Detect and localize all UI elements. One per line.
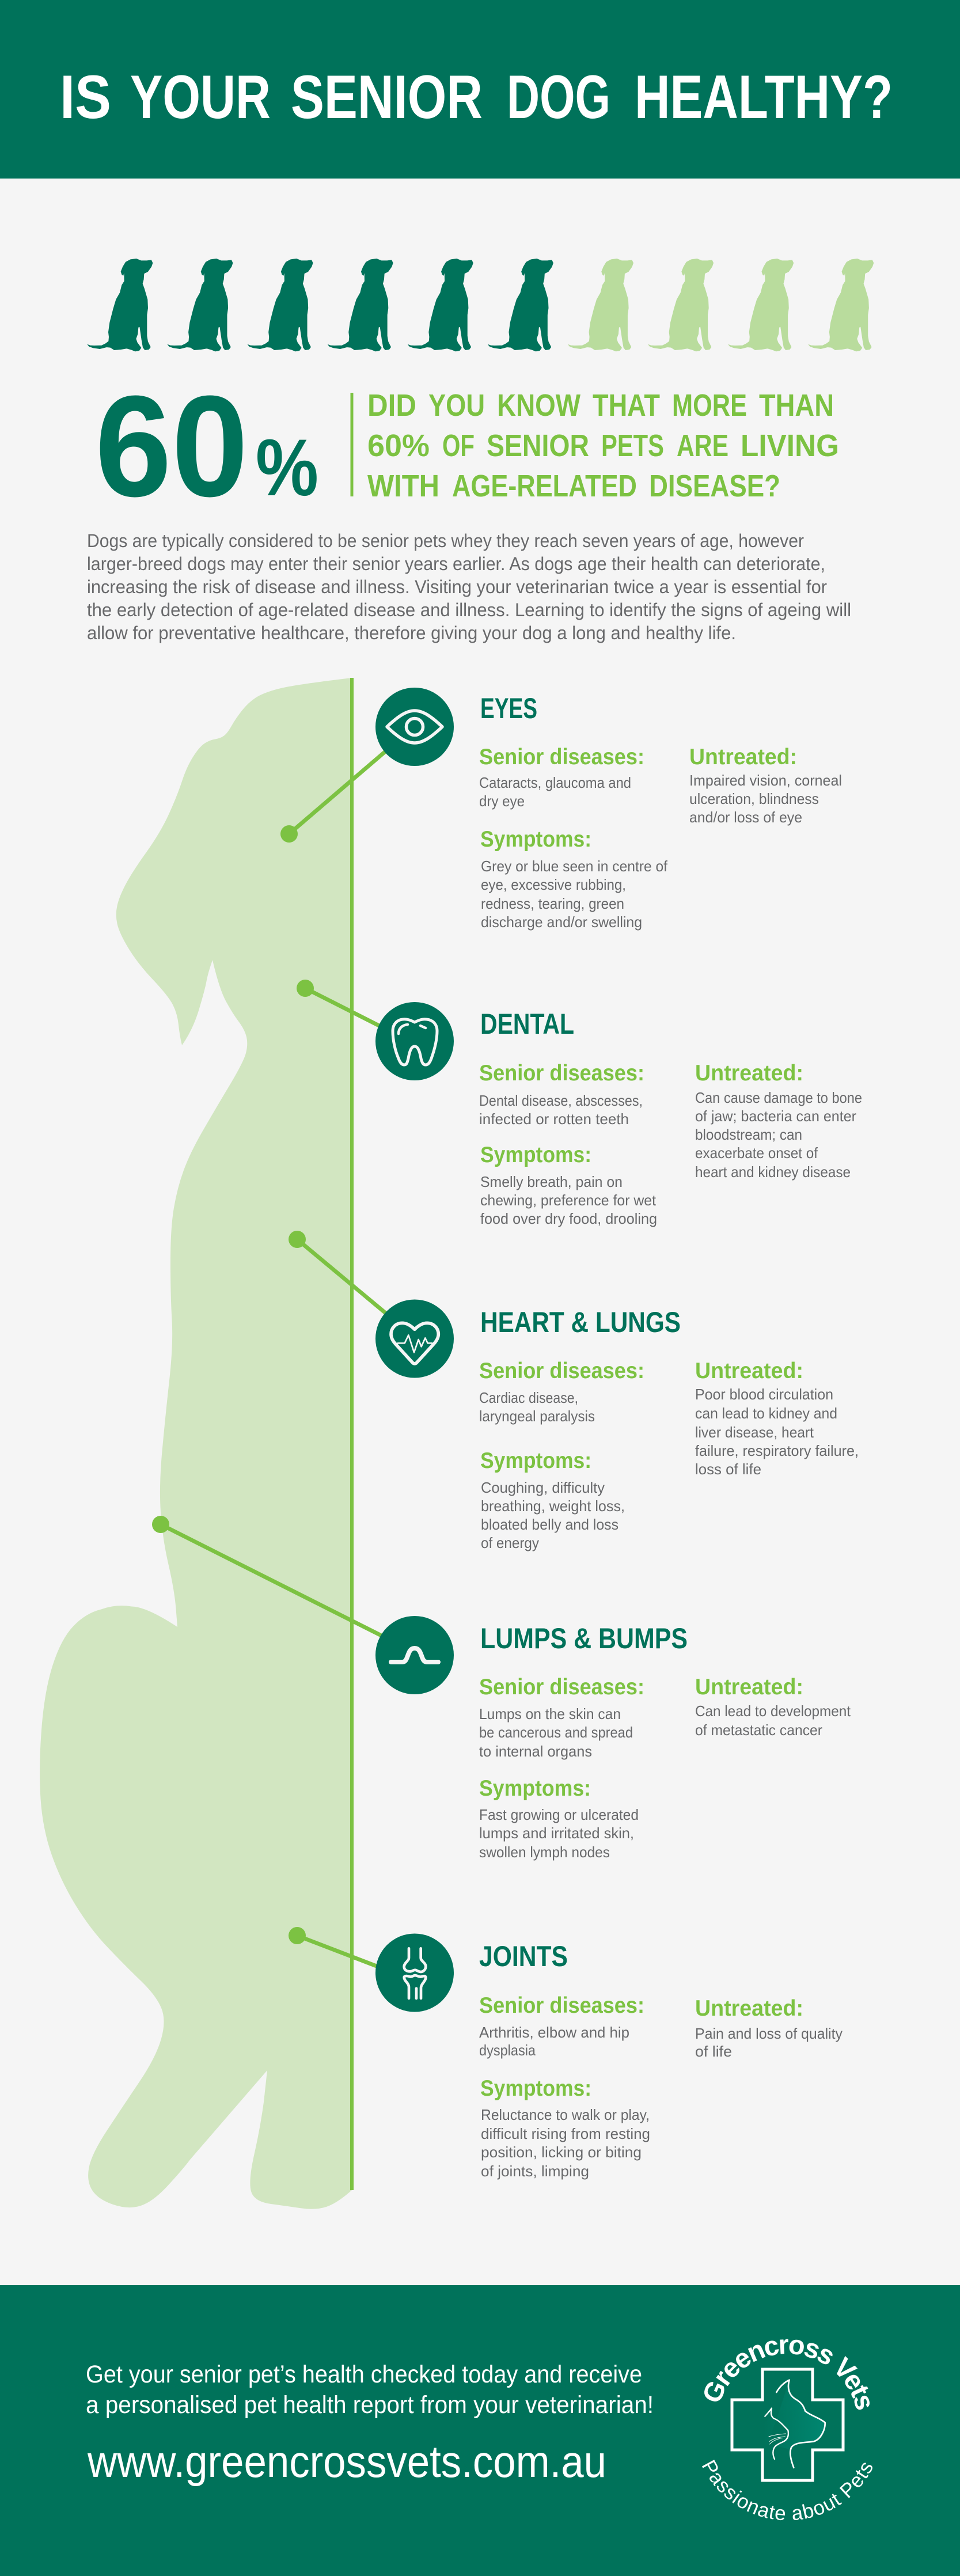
callout question: THAT — [593, 388, 660, 423]
text: symptoms — [481, 1479, 625, 1551]
footer call to action: a personalised pet health report from your veterinarian! — [86, 2391, 654, 2419]
connector: lumps — [152, 1516, 397, 1644]
title — [60, 62, 893, 131]
text: symptoms: Grey or blue seen in centre of — [481, 858, 668, 875]
subheading: untreated: Untreated: — [695, 1675, 803, 1699]
callout question: WITH — [367, 469, 439, 503]
text: untreated: bloodstream; can — [695, 1126, 802, 1143]
text: untreated: loss of life — [695, 1460, 761, 1478]
text: symptoms — [480, 1173, 657, 1227]
text: senior diseases: infected or rotten teeth — [479, 1110, 629, 1128]
subheading: senior diseases: Senior diseases: — [479, 745, 644, 769]
callout question: 60% — [367, 428, 430, 463]
big statistic: 60%: % — [256, 422, 318, 513]
title: DOG — [507, 62, 610, 131]
connector: heart — [289, 1231, 397, 1323]
subheading: untreated: Untreated: — [695, 1061, 803, 1086]
text: untreated: failure, respiratory failure, — [695, 1442, 859, 1459]
subheading: untreated: Untreated: — [689, 745, 797, 769]
text: senior diseases: Lumps on the skin can — [479, 1705, 621, 1723]
text: symptoms: Fast growing or ulcerated — [479, 1806, 639, 1823]
text: senior diseases: dysplasia — [479, 2042, 536, 2059]
intro paragraph: allow for preventative healthcare, therefore giving your dog a long and healthy life. — [87, 623, 736, 643]
subheading: untreated: Untreated: — [695, 1996, 803, 2021]
intro paragraph — [87, 530, 851, 643]
text: untreated: Can lead to development — [695, 1702, 851, 1720]
text: untreated: and/or loss of eye — [689, 809, 802, 826]
logo: Greencross Vets — [702, 2339, 872, 2520]
connector: joints — [289, 1927, 392, 1972]
panel: heart and lungs — [289, 1231, 859, 1551]
text: senior diseases — [479, 1705, 633, 1760]
text: senior diseases: laryngeal paralysis — [479, 1407, 595, 1425]
connector: eyes — [280, 741, 397, 843]
callout question: ARE — [677, 428, 728, 463]
text: symptoms: Reluctance to walk or play, — [481, 2106, 650, 2123]
text: untreated: exacerbate onset of — [695, 1144, 818, 1162]
text: senior diseases: dry eye — [479, 792, 525, 810]
text: untreated: ulceration, blindness — [689, 790, 819, 807]
heading: dental: DENTAL — [480, 1008, 574, 1040]
subheading: senior diseases: Senior diseases: — [479, 1993, 644, 2018]
text: senior diseases — [479, 2024, 629, 2059]
panel: joints — [289, 1927, 843, 2180]
subheading: symptoms: Symptoms: — [480, 1143, 591, 1167]
subheading: symptoms: Symptoms: — [480, 827, 591, 852]
text: untreated — [695, 2025, 843, 2060]
callout question: DID — [367, 388, 416, 423]
callout question: KNOW — [497, 388, 580, 423]
connector: dental — [297, 980, 392, 1032]
text: untreated: Can cause damage to bone — [695, 1089, 862, 1106]
text: senior diseases — [479, 774, 631, 810]
callout question: YOU — [428, 388, 485, 423]
intro paragraph: larger-breed dogs may enter their senior years earlier. As dogs age their health can deteriorate, — [87, 553, 825, 574]
callout question: DISEASE? — [649, 469, 780, 503]
text: senior diseases: be cancerous and spread — [479, 1724, 633, 1741]
callout question: THAN — [759, 388, 834, 423]
text: symptoms — [481, 2106, 650, 2180]
text: untreated — [695, 1386, 859, 1478]
text: symptoms: discharge and/or swelling — [481, 913, 642, 931]
text: untreated: Poor blood circulation — [695, 1386, 833, 1403]
large dog silhouette — [40, 678, 352, 2209]
text: symptoms: difficult rising from resting — [481, 2125, 650, 2142]
callout question — [367, 388, 839, 503]
intro paragraph: increasing the risk of disease and illness. Visiting your veterinarian twice a year is essential for — [87, 576, 827, 597]
subheading: senior diseases: Senior diseases: — [479, 1675, 644, 1699]
subheading: symptoms: Symptoms: — [480, 1448, 591, 1473]
footer call to action — [86, 2361, 654, 2419]
text: senior diseases: to internal organs — [479, 1743, 592, 1760]
text: symptoms: Coughing, difficulty — [481, 1479, 605, 1496]
panel: eyes — [280, 688, 842, 931]
subheading: symptoms: Symptoms: — [480, 2076, 591, 2101]
footer call to action: Get your senior pet’s health checked today and receive — [86, 2361, 642, 2388]
text: symptoms: bloated belly and loss — [481, 1516, 619, 1533]
subheading: untreated: Untreated: — [695, 1359, 803, 1383]
text: untreated: of life — [695, 2043, 732, 2060]
text: untreated — [695, 1702, 851, 1739]
panel: lumps and bumps — [152, 1516, 851, 1861]
text: untreated — [689, 772, 842, 826]
text: symptoms: chewing, preference for wet — [480, 1192, 657, 1209]
icon: eye — [375, 688, 454, 766]
text: untreated — [695, 1089, 862, 1181]
text: untreated: Pain and loss of quality — [695, 2025, 843, 2042]
text: symptoms: breathing, weight loss, — [481, 1497, 625, 1515]
header band — [0, 0, 960, 179]
text: untreated: can lead to kidney and — [695, 1405, 837, 1422]
callout question: SENIOR — [487, 428, 589, 463]
text: symptoms: food over dry food, drooling — [480, 1210, 657, 1227]
text: symptoms: position, licking or biting — [481, 2143, 642, 2161]
text: symptoms: eye, excessive rubbing, — [481, 876, 626, 893]
icon: lump — [375, 1616, 454, 1694]
divider — [350, 393, 354, 496]
text: untreated: heart and kidney disease — [695, 1163, 851, 1181]
subheading: senior diseases: Senior diseases: — [479, 1061, 644, 1086]
text: untreated: liver disease, heart — [695, 1424, 814, 1441]
text: untreated: of jaw; bacteria can enter — [695, 1107, 856, 1125]
icon: tooth — [375, 1002, 454, 1080]
text: symptoms — [481, 858, 668, 931]
text: symptoms — [479, 1806, 639, 1861]
text: symptoms: swollen lymph nodes — [479, 1843, 610, 1861]
icon: knee joint — [375, 1934, 454, 2012]
central vertical axis line — [350, 678, 354, 2190]
title: YOUR — [130, 62, 271, 131]
heading: joints: JOINTS — [479, 1940, 568, 1972]
text: senior diseases — [479, 1389, 595, 1425]
subheading: symptoms: Symptoms: — [479, 1776, 591, 1801]
icon: heart with pulse — [375, 1299, 454, 1378]
title: HEALTHY? — [635, 62, 893, 131]
callout question: OF — [442, 428, 475, 463]
text: symptoms: of joints, limping — [481, 2163, 589, 2180]
text: senior diseases — [479, 1092, 643, 1128]
callout question: MORE — [672, 388, 747, 423]
text: senior diseases: Dental disease, abscesses, — [479, 1092, 643, 1109]
text: symptoms: of energy — [481, 1534, 539, 1551]
text: senior diseases: Cataracts, glaucoma and — [479, 774, 631, 791]
text: untreated: of metastatic cancer — [695, 1721, 822, 1739]
subheading: senior diseases: Senior diseases: — [479, 1359, 644, 1383]
callout question: PETS — [601, 428, 664, 463]
pictogram: 10 dogs, 6 highlighted — [88, 259, 874, 351]
website url: www.greencrossvets.com.au — [87, 2436, 606, 2487]
text: symptoms: redness, tearing, green — [481, 895, 624, 912]
text: senior diseases: Cardiac disease, — [479, 1389, 578, 1406]
title: SENIOR — [291, 62, 483, 131]
logo: Greencross Vets: Greencross Vets — [704, 2339, 870, 2410]
text: untreated: Impaired vision, corneal — [689, 772, 842, 789]
panel: dental — [297, 980, 862, 1227]
text: symptoms: Smelly breath, pain on — [480, 1173, 623, 1190]
callout question: AGE-RELATED — [452, 469, 637, 503]
heading: lumps and bumps: LUMPS & BUMPS — [480, 1622, 688, 1655]
heading: heart and lungs: HEART & LUNGS — [480, 1306, 681, 1338]
heading: eyes: EYES — [480, 692, 537, 724]
title: IS — [60, 62, 111, 131]
logo: Greencross Vets: Passionate about Pets — [702, 2460, 872, 2520]
text: symptoms: lumps and irritated skin, — [479, 1824, 634, 1842]
intro paragraph: the early detection of age-related disease and illness. Learning to identify the signs of ageing will — [87, 600, 851, 620]
callout question: LIVING — [741, 428, 839, 463]
intro paragraph: Dogs are typically considered to be senior pets whey they reach seven years of age, however — [87, 530, 804, 551]
footer band — [0, 2285, 960, 2576]
big statistic: 60%: 60 — [95, 366, 248, 526]
text: senior diseases: Arthritis, elbow and hip — [479, 2024, 629, 2041]
